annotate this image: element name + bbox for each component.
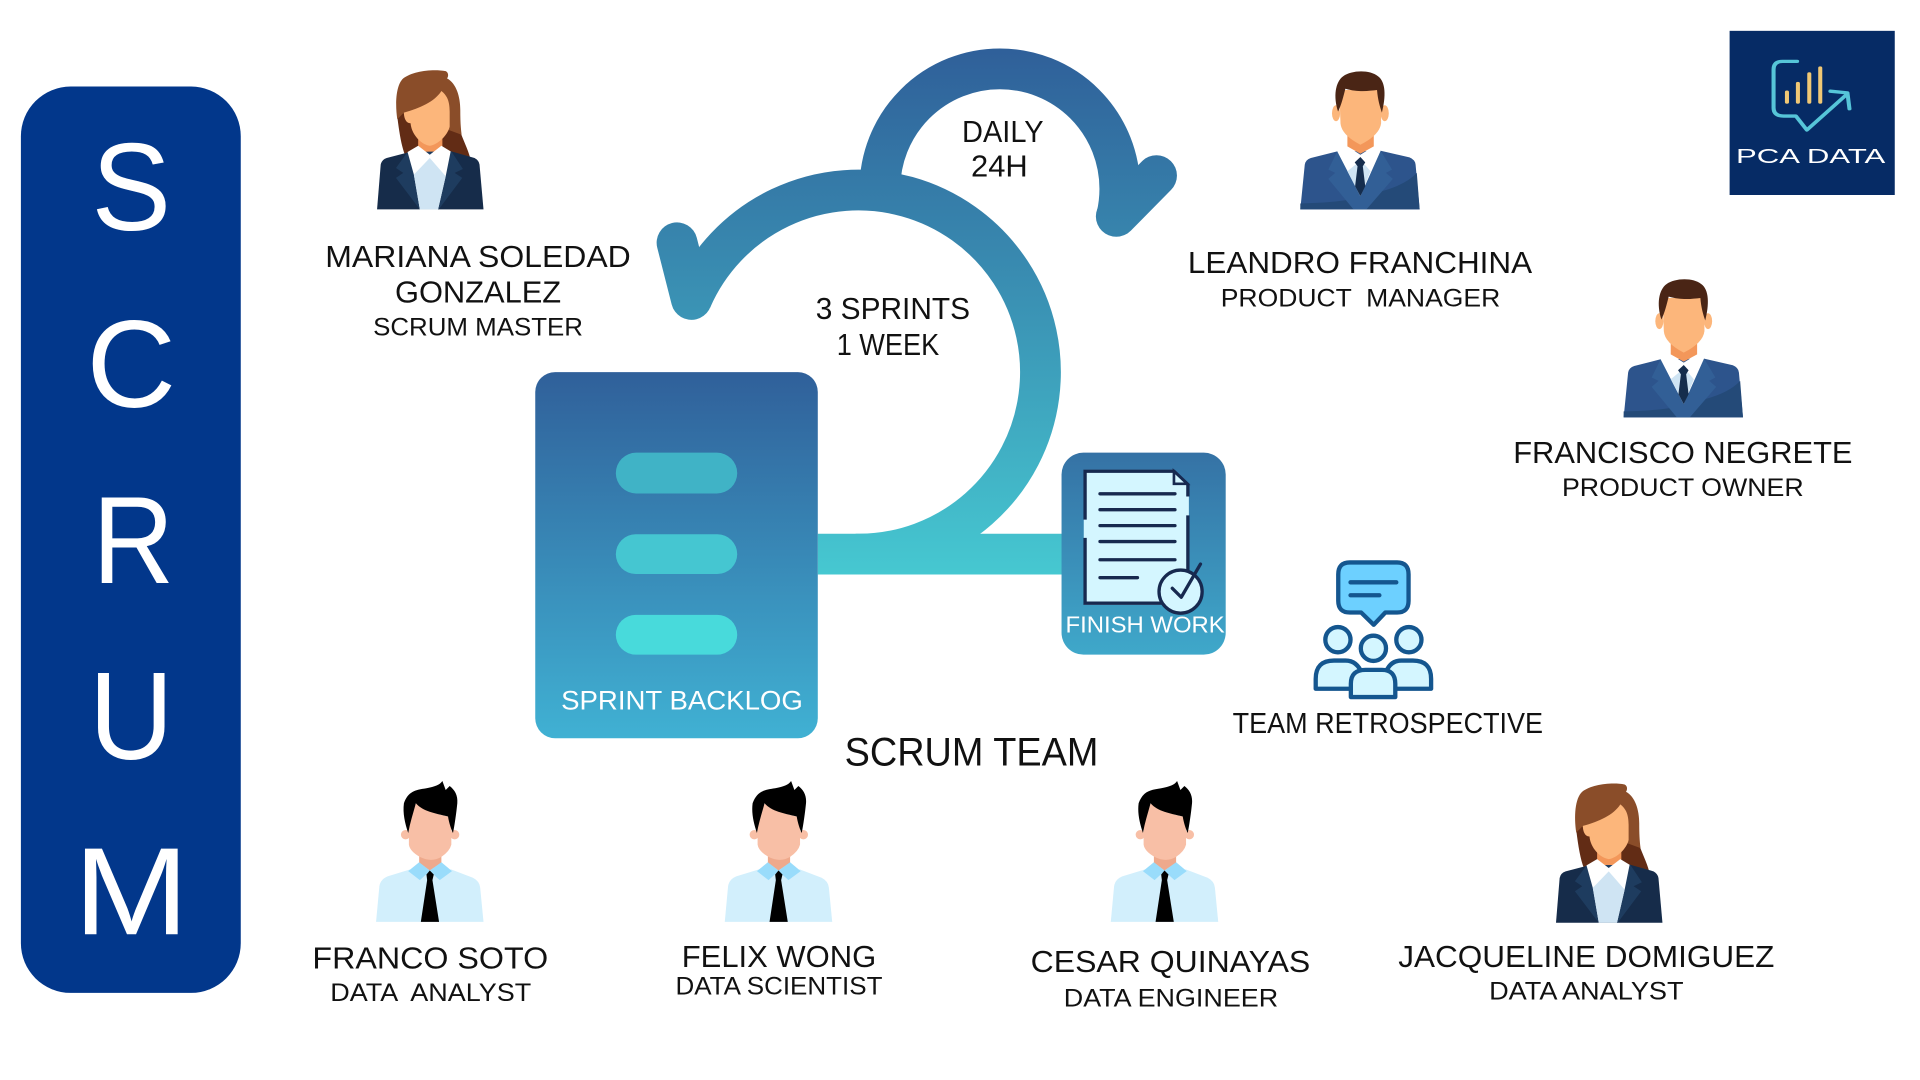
person: Leandro Franchina bbox=[1188, 71, 1533, 313]
heading letter C: C bbox=[87, 295, 176, 434]
text: 3 sprints 1 week: 3 SPRINTS bbox=[816, 291, 970, 326]
name: LEANDRO FRANCHINA bbox=[1188, 245, 1533, 280]
text: daily 24h bbox=[962, 114, 1044, 183]
person: Felix Wong bbox=[676, 781, 882, 1000]
name: FRANCISCO NEGRETE bbox=[1513, 435, 1852, 470]
icon: young man avatar bbox=[376, 781, 484, 922]
arrow: daily 24h cycle bbox=[880, 69, 1157, 216]
panel: finish work bbox=[1062, 453, 1226, 655]
role: PRODUCT OWNER bbox=[1562, 474, 1804, 502]
role: SCRUM MASTER bbox=[373, 314, 583, 342]
panel: SCRUM vertical banner bbox=[21, 87, 241, 993]
icon: finished document bbox=[1084, 470, 1202, 613]
icon: young man avatar bbox=[725, 781, 832, 922]
heading letter R: R bbox=[93, 471, 174, 610]
heading letter S: S bbox=[92, 118, 171, 257]
logo: PCA Data bbox=[1730, 31, 1895, 195]
panel: sprint backlog bbox=[535, 372, 818, 738]
name: FELIX WONG bbox=[682, 939, 876, 974]
role: DATA ANALYST bbox=[330, 979, 531, 1007]
backlog item pill 2 bbox=[616, 534, 737, 574]
icon: woman avatar bbox=[1556, 784, 1662, 923]
arrow: sprint cycle bbox=[677, 190, 1065, 554]
role: DATA ANALYST bbox=[1489, 977, 1684, 1005]
person: Jacqueline Domiguez bbox=[1398, 784, 1774, 1005]
text: team retrospective: TEAM RETROSPECTIVE bbox=[1233, 708, 1543, 740]
text: 3 sprints 1 week bbox=[816, 291, 970, 362]
person: Mariana Soledad Gonzalez bbox=[325, 70, 631, 342]
heading letter U: U bbox=[89, 647, 174, 786]
logo text: PCA DATA bbox=[1736, 146, 1886, 168]
text: 3 sprints 1 week: 1 WEEK bbox=[837, 327, 940, 362]
text: daily 24h: DAILY bbox=[962, 114, 1044, 149]
icon: woman avatar bbox=[377, 70, 484, 209]
person: Francisco Negrete bbox=[1513, 279, 1852, 502]
name: MARIANA SOLEDAD bbox=[325, 239, 631, 274]
name: CESAR QUINAYAS bbox=[1031, 944, 1310, 979]
icon: young man avatar bbox=[1111, 781, 1218, 922]
label: finish work: FINISH WORK bbox=[1066, 612, 1225, 638]
person: Cesar Quinayas bbox=[1031, 781, 1310, 1013]
icon: team retrospective bbox=[1316, 562, 1431, 697]
role: PRODUCT MANAGER bbox=[1221, 285, 1500, 313]
icon: chart speech bubble bbox=[1774, 61, 1849, 130]
role: DATA SCIENTIST bbox=[676, 972, 882, 1000]
heading letter M: M bbox=[74, 822, 189, 961]
text: daily 24h: 24H bbox=[971, 148, 1028, 183]
heading: scrum team: SCRUM TEAM bbox=[845, 730, 1098, 774]
person: Mariana Soledad Gonzalez: GONZALEZ bbox=[395, 275, 561, 310]
backlog item pill 1 bbox=[616, 453, 737, 493]
label: sprint backlog: SPRINT BACKLOG bbox=[561, 685, 803, 715]
icon: man avatar bbox=[1624, 279, 1743, 417]
backlog item pill 3 bbox=[616, 615, 737, 655]
name: FRANCO SOTO bbox=[312, 941, 548, 976]
icon: man avatar bbox=[1300, 71, 1420, 209]
name: JACQUELINE DOMIGUEZ bbox=[1398, 939, 1774, 974]
person: Franco Soto bbox=[312, 781, 548, 1007]
role: DATA ENGINEER bbox=[1064, 985, 1278, 1013]
